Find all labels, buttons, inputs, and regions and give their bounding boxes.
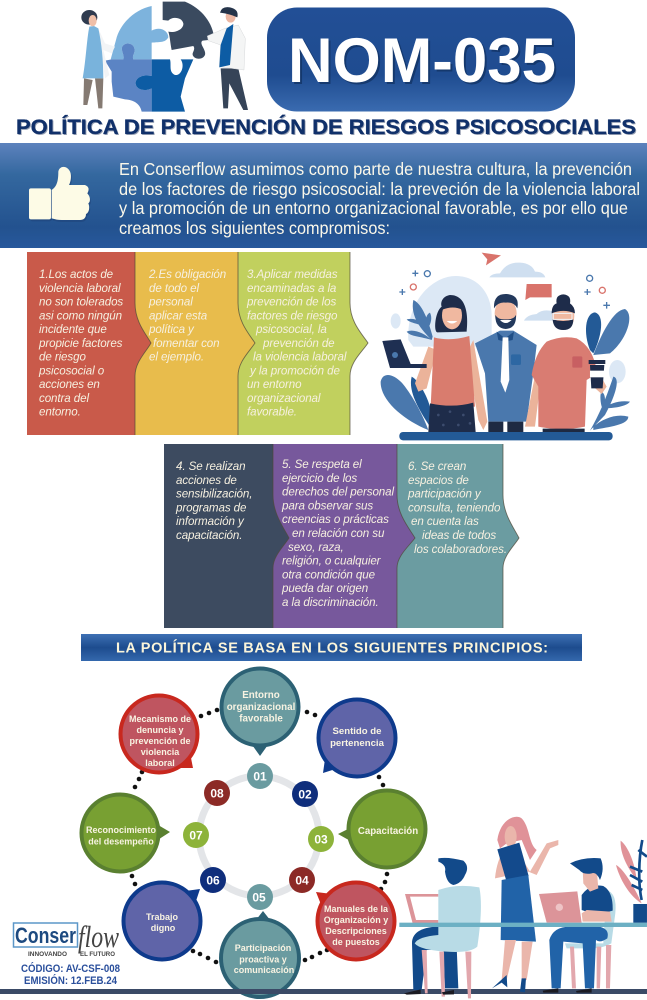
card 6: ideas de todos [422, 529, 496, 542]
floor line [0, 989, 647, 994]
card 4: capacitación. [176, 529, 242, 542]
card 1: propicie factores [38, 337, 123, 350]
principle 01: favorable [239, 714, 283, 724]
card 3: 3.Aplicar medidas [247, 268, 338, 281]
principle 08: prevención de [129, 736, 191, 746]
principle 06: 06 [206, 874, 220, 888]
principle 05 [221, 884, 299, 997]
main heading: POLÍTICA DE PREVENCIÓN DE RIESGOS PSICOSOCIALES [17, 115, 637, 140]
panel: commitments 1 to 3 [27, 252, 368, 435]
principle 02: Sentido de [332, 726, 382, 737]
illustration: office team at table [399, 817, 647, 998]
principle 06 [124, 867, 226, 960]
principle 01: Entorno [242, 690, 280, 701]
card 1: incidente que [39, 323, 107, 336]
card 5: sexo, raza, [288, 541, 344, 554]
principle 04: 04 [295, 874, 309, 888]
card 2: personal [148, 296, 193, 308]
principle 03 [308, 790, 426, 868]
card 1: de riesgo [39, 350, 86, 364]
principle 01: 01 [253, 770, 267, 784]
principle 08: Mecanismo de [129, 714, 191, 724]
logo and document code [14, 919, 120, 987]
illustration: team of three people [381, 253, 630, 440]
logo and document code: EMISIÓN: 12.FEB.24 [24, 974, 118, 987]
principle 08 [120, 696, 230, 806]
card 2 [100, 252, 255, 435]
card 3: prevención de [262, 337, 335, 350]
principle 07: del desempeño [88, 836, 154, 846]
card 3: organizacional [247, 392, 321, 405]
card 2: política y [148, 323, 195, 336]
card 1: contra del [39, 392, 89, 405]
card 3: un entorno [247, 378, 302, 391]
card 6: 6. Se crean [408, 460, 466, 473]
intro text: creamos los siguientes compromisos: [119, 218, 390, 238]
card 1: psicosocial o [38, 364, 105, 377]
principle 08: 08 [210, 786, 224, 800]
card 1 [27, 252, 151, 435]
card 3: psicosocial, la [255, 323, 327, 336]
card 6: participación y [407, 488, 482, 501]
card 1: 1.Los actos de [39, 268, 114, 281]
principle 01: organizacional [227, 702, 296, 713]
principle 05: Participación [235, 943, 291, 953]
principle 01 [222, 668, 298, 789]
card 3: la violencia laboral [253, 350, 347, 364]
card 4: 4. Se realizan [176, 460, 246, 473]
card 1: entorno. [39, 406, 81, 418]
NOM-035 title badge: NOM-035 [288, 26, 556, 96]
logo and document code: CÓDIGO: AV-CSF-008 [21, 962, 120, 975]
card 5: pueda dar origen [281, 582, 368, 595]
principles banner: LA POLÍTICA SE BASA EN LOS SIGUIENTES PRINCIPIOS: [116, 640, 548, 656]
principle 04 [289, 867, 394, 960]
principles banner [81, 634, 582, 661]
intro text [119, 159, 640, 238]
card 4: acciones de [176, 474, 237, 487]
card 6: espacios de [408, 474, 469, 487]
principle 05: comunicación [234, 965, 294, 975]
card 1: acciones en [39, 378, 100, 391]
logo and document code: flow [78, 919, 119, 954]
principle 08: denuncia y [136, 725, 184, 735]
card 2: fomentar con [153, 337, 219, 350]
card 1: asi como ningún [39, 309, 122, 322]
logo and document code: Conser [15, 923, 76, 948]
card 5: a la discriminación. [282, 596, 379, 609]
NOM-035 title badge [267, 8, 575, 112]
card 5: creencias o prácticas [282, 513, 389, 526]
card 4: información y [176, 515, 245, 528]
card 4: sensibilización, [176, 488, 252, 501]
card 4 [164, 444, 289, 628]
panel: commitments 4 to 6 [164, 444, 519, 628]
card 3: factores de riesgo [247, 309, 338, 322]
card 6: consulta, teniendo [408, 501, 501, 514]
principle 06: Trabajo [146, 912, 179, 922]
card 1: no son tolerados [39, 296, 123, 308]
card 5: derechos del personal [282, 486, 395, 499]
card 5: 5. Se respeta el [282, 458, 362, 471]
card 4: programas de [175, 501, 247, 514]
principle 06: digno [151, 923, 176, 933]
card 6: en cuenta las [411, 515, 479, 528]
card 2: aplicar esta [149, 309, 208, 322]
principle 04: Organización y [324, 915, 388, 925]
principle 02: 02 [298, 788, 312, 802]
NOM-035 title badge: NOM-035 [290, 28, 558, 98]
card 6 [360, 444, 519, 628]
principle 03: 03 [314, 832, 328, 846]
card 5: otra condición que [282, 568, 376, 581]
card 2: de todo el [149, 282, 199, 295]
principle 07: 07 [189, 828, 203, 842]
card 5: religión, o cualquier [282, 555, 382, 568]
principle 07 [82, 794, 209, 872]
principle 05: 05 [252, 890, 266, 904]
principle 04: Descripciones [325, 926, 387, 936]
card 5 [250, 444, 415, 628]
panel: intro band [0, 143, 647, 248]
principle 08: violencia [141, 747, 180, 757]
card 2: 2.Es obligación [148, 268, 226, 281]
chart: principles wheel [82, 668, 426, 997]
card 5: para observar sus [281, 499, 373, 512]
principle 07: Reconocimiento [86, 825, 157, 835]
card 6: los colaboradores. [414, 543, 507, 556]
principle 05: proactiva y [239, 954, 287, 964]
principle 04: Manuales de la [324, 904, 389, 914]
card 1: violencia laboral [39, 282, 121, 295]
principle 02 [292, 700, 396, 807]
card 3: favorable. [247, 406, 297, 418]
principle 08: laboral [145, 758, 175, 768]
principle 04: de puestos [332, 937, 380, 947]
card 3: prevención de los [246, 296, 336, 308]
logo and document code: INNOVANDO [28, 952, 67, 958]
card 5: ejercicio de los [282, 472, 357, 485]
logo and document code: EL FUTURO [80, 952, 115, 958]
card 3 [200, 252, 368, 435]
card 5: en relación con su [292, 527, 385, 540]
icon: thumbs up [29, 167, 91, 222]
principle 02: pertenencia [330, 738, 385, 749]
principle 03: Capacitación [358, 826, 418, 837]
card 3: encaminadas a la [247, 282, 337, 295]
illustration: people assembling a puzzle head [81, 2, 248, 112]
card 3: y la promoción de [249, 364, 340, 377]
main heading: POLÍTICA DE PREVENCIÓN DE RIESGOS PSICOSOCIALES [16, 114, 636, 139]
card 2: el ejemplo. [149, 350, 204, 364]
